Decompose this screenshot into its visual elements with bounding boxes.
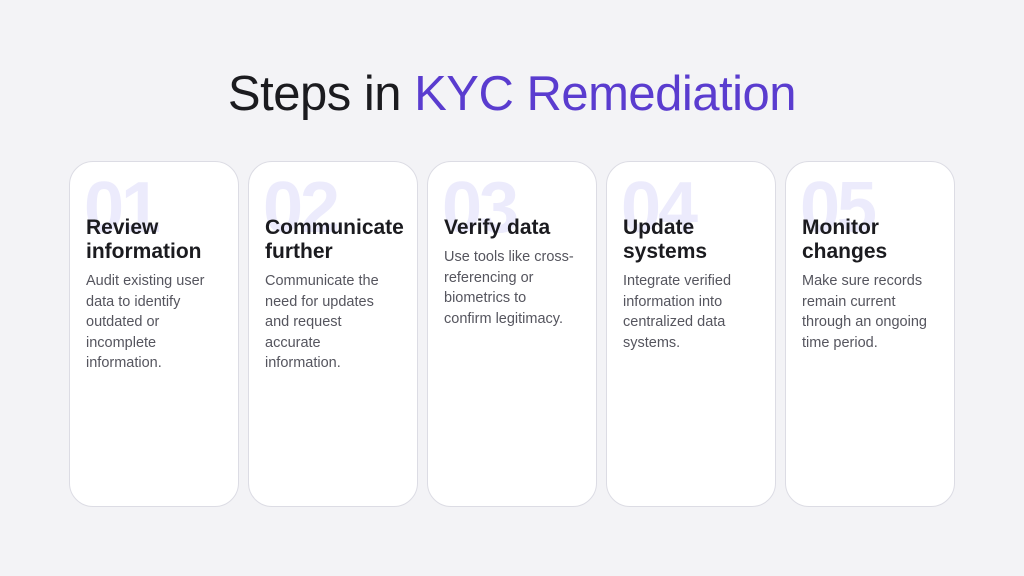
body: referencing or: [444, 270, 533, 286]
number 04: 04: [621, 168, 695, 248]
number 03: 03: [442, 168, 516, 248]
body: Use tools like cross-: [444, 249, 574, 265]
number 01: 01: [84, 168, 158, 248]
body: [444, 249, 574, 326]
card 1: [69, 161, 239, 507]
card 4: [606, 161, 776, 507]
card 5: [785, 161, 955, 507]
heading: Communicate further: [265, 216, 404, 263]
heading: Review information: [86, 216, 202, 263]
body: Communicate the need for updates and request accurate information.: [265, 273, 379, 371]
heading: Verify data: [444, 216, 550, 239]
heading: Monitor changes: [802, 216, 887, 263]
body: confirm legitimacy.: [444, 310, 563, 326]
card 3: [427, 161, 597, 507]
number 05: 05: [800, 168, 874, 248]
body: Make sure records remain current through an ongoing time period.: [802, 273, 927, 350]
title: Steps in KYC Remediation: [228, 67, 796, 121]
body: Integrate verified information into centralized data systems.: [623, 273, 731, 350]
body: biometrics to: [444, 290, 526, 306]
body: Audit existing user data to identify outdated or incomplete information.: [86, 273, 204, 371]
card 2: [248, 161, 418, 507]
number 02: 02: [263, 168, 337, 248]
heading: Update systems: [623, 216, 707, 263]
